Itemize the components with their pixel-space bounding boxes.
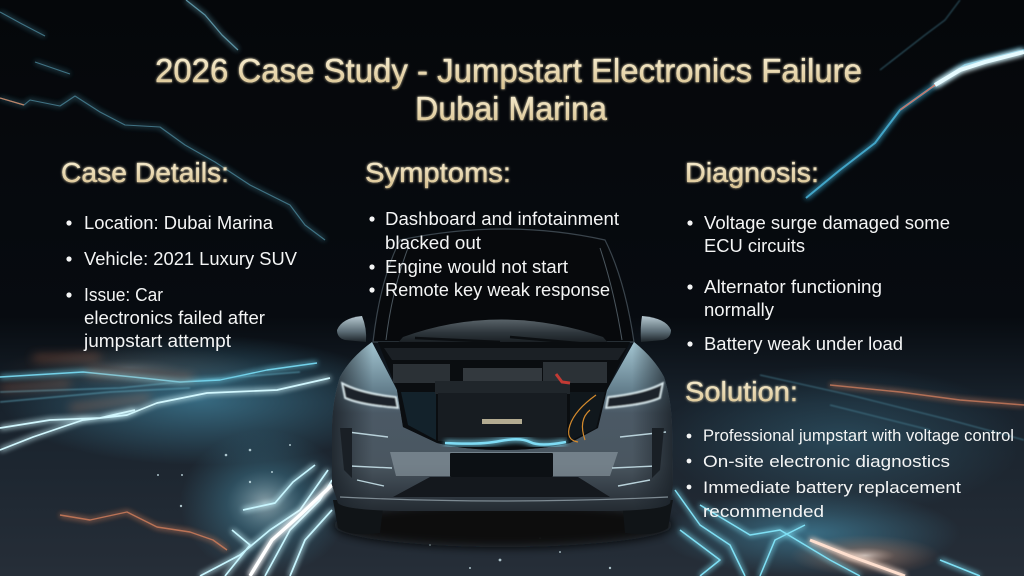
body [332,342,673,511]
bumper vents [348,432,666,486]
sparks [157,444,611,569]
list: solution: Immediate battery replacement [703,478,961,497]
panel: solution [685,376,1014,521]
battery [435,374,570,441]
title [155,52,862,127]
bumper highlight [390,452,618,476]
body side shading [332,342,673,511]
list: case details: Vehicle: 2021 Luxury SUV [84,249,297,269]
list: solution: On-site electronic diagnostics [703,452,950,471]
panel: diagnosis [685,157,950,354]
panel: case details [61,157,297,351]
list: case details [66,213,297,351]
list: symptoms: blacked out [385,233,481,253]
bumper edge [340,497,668,501]
heading: symptoms: Symptoms: [365,157,511,188]
heading: case details: Case Details: [61,157,229,188]
headlights [342,383,663,408]
heading: solution: Solution: [685,376,798,407]
license plate [450,453,553,477]
list: case details: Issue: Car [84,285,163,305]
ground shadow [333,503,673,547]
list: solution [687,426,1014,521]
lightning: bottom left burst [200,465,332,576]
list: symptoms: Dashboard and infotainment [385,209,619,229]
list: case details: Location: Dubai Marina [84,213,274,233]
raised hood [373,229,634,342]
title: 2026 Case Study - Jumpstart Electronics Failure [155,52,862,89]
car [332,229,673,547]
title: Dubai Marina [415,90,608,127]
list: symptoms: Remote key weak response [385,280,610,300]
battery spark [445,439,566,444]
list: diagnosis: Voltage surge damaged some [704,213,950,233]
list: case details: jumpstart attempt [83,331,231,351]
list: solution: recommended [703,502,824,521]
list: solution: Professional jumpstart with voltage control [703,426,1014,445]
list: diagnosis [687,213,950,354]
lightning: top right [806,0,1024,198]
lightning: right streaks [675,375,1024,576]
wheels [333,500,673,534]
lightning: top left [0,0,325,240]
heading: diagnosis: Diagnosis: [685,157,819,188]
list: diagnosis: ECU circuits [704,236,805,256]
mirrors [337,316,671,342]
windshield [396,320,610,345]
lightning: left streaks [0,357,330,550]
panel: symptoms [365,157,619,300]
list: diagnosis: Battery weak under load [704,334,903,354]
engine bay [378,342,630,450]
list: diagnosis: Alternator functioning [704,277,882,297]
engine components [393,362,607,441]
lower grille [393,477,610,497]
list: symptoms [369,209,619,300]
list: symptoms: Engine would not start [385,257,568,277]
wipers [415,337,600,345]
wires [569,395,596,442]
list: diagnosis: normally [704,300,774,320]
list: case details: electronics failed after [84,308,265,328]
